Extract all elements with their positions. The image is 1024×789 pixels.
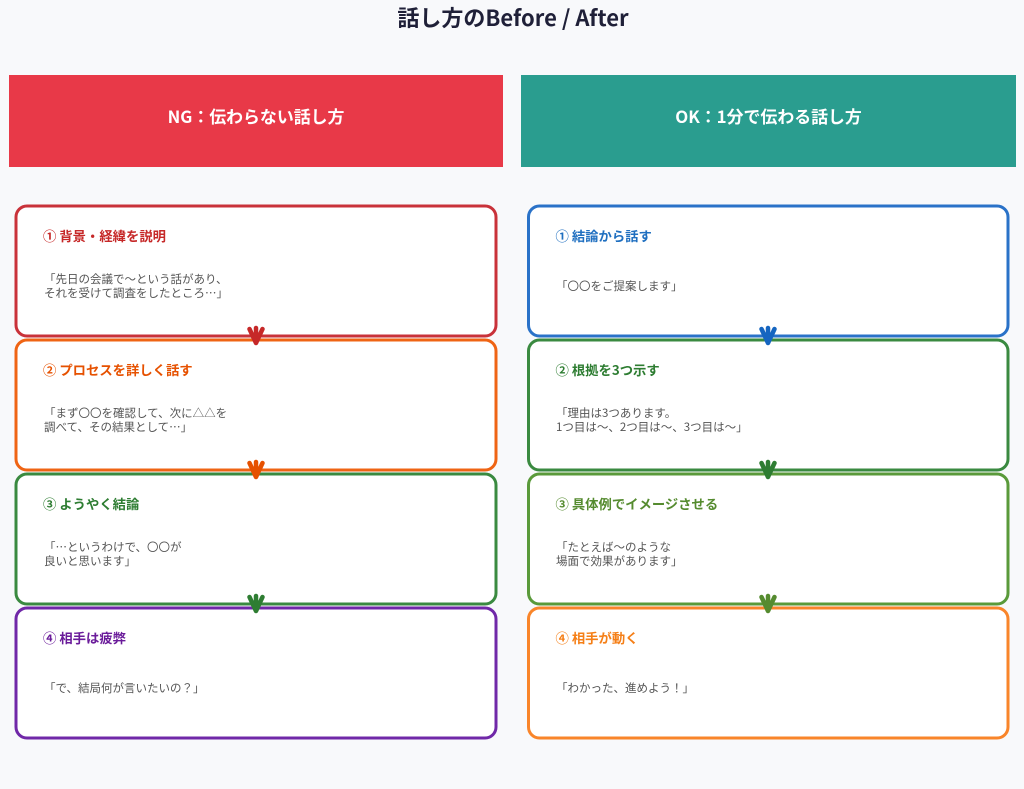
panel: NG step 4 <box>16 608 496 738</box>
arrow: OK 2 to 3 <box>762 462 774 477</box>
panel: NG step 1: 「先日の会議で〜という話があり、 <box>44 271 228 287</box>
panel: NG step 2: 調べて、その結果として…」 <box>44 419 192 435</box>
title: 話し方のBefore / After <box>397 1 629 33</box>
panel: NG header <box>9 75 503 167</box>
panel: OK step 1 <box>528 206 1008 336</box>
arrow: NG 3 to 4 <box>250 596 262 611</box>
panel: NG step 1: ① 背景・経緯を説明 <box>43 226 166 245</box>
panel: OK step 3: ③ 具体例でイメージさせる <box>556 494 718 513</box>
panel: NG step 4: ④ 相手は疲弊 <box>43 628 126 647</box>
panel: NG step 4: 「で、結局何が言いたいの？」 <box>44 680 205 696</box>
panel: NG step 2 <box>16 340 496 470</box>
panel: OK step 4: ④ 相手が動く <box>556 628 638 647</box>
panel: NG header: NG：伝わらない話し方 <box>168 103 344 128</box>
panel: OK header: OK：1分で伝わる話し方 <box>675 103 862 128</box>
panel: NG step 3: 良いと思います」 <box>44 553 136 569</box>
panel: NG step 2: 「まず〇〇を確認して、次に△△を <box>44 405 227 421</box>
arrow: NG 1 to 2 <box>250 328 262 343</box>
panel: OK step 3: 「たとえば〜のような <box>556 539 671 555</box>
panel: OK step 2: 「理由は3つあります。 <box>556 405 676 421</box>
panel: NG step 3: ③ ようやく結論 <box>43 494 140 513</box>
panel: OK step 2: 1つ目は〜、2つ目は〜、3つ目は〜」 <box>556 419 748 435</box>
panel: OK step 3 <box>528 474 1008 604</box>
panel: OK step 4 <box>528 608 1008 738</box>
panel: OK step 1: 「〇〇をご提案します」 <box>556 278 682 294</box>
panel: NG step 2: ② プロセスを詳しく話す <box>43 360 193 379</box>
panel: OK step 4: 「わかった、進めよう！」 <box>556 680 694 696</box>
panel: OK step 3: 場面で効果があります」 <box>556 553 682 569</box>
arrow: NG 2 to 3 <box>250 462 262 477</box>
panel: OK step 2: ② 根拠を3つ示す <box>556 360 660 379</box>
panel: NG step 1: それを受けて調査をしたところ…」 <box>44 285 228 301</box>
arrow: OK 3 to 4 <box>762 596 774 611</box>
panel: NG step 3: 「…というわけで、〇〇が <box>44 539 182 555</box>
panel: NG step 1 <box>16 206 496 336</box>
panel: OK step 2 <box>528 340 1008 470</box>
panel: OK step 1: ① 結論から話す <box>556 226 652 245</box>
panel: OK header <box>521 75 1016 167</box>
arrow: OK 1 to 2 <box>762 328 774 343</box>
panel: NG step 3 <box>16 474 496 604</box>
